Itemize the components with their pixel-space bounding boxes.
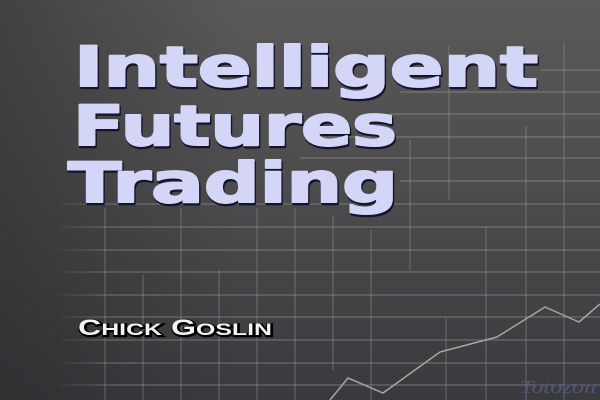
title line: Trading	[68, 151, 399, 217]
price line chart	[330, 304, 600, 400]
author name: C HICK G OSLIN	[79, 316, 273, 341]
title line: Intelligent	[74, 35, 539, 101]
title	[68, 35, 539, 217]
title line: Futures: Futures	[73, 94, 397, 158]
title line: Intelligent: Intelligent	[74, 35, 538, 99]
title line: Trading: Trading	[69, 153, 399, 217]
watermark: Totozon	[520, 377, 596, 397]
title line: Trading: Trading	[68, 151, 398, 215]
author name: C HICK G OSLIN	[78, 315, 272, 340]
title line: Futures: Futures	[74, 96, 398, 160]
title line: Intelligent: Intelligent	[75, 37, 539, 101]
